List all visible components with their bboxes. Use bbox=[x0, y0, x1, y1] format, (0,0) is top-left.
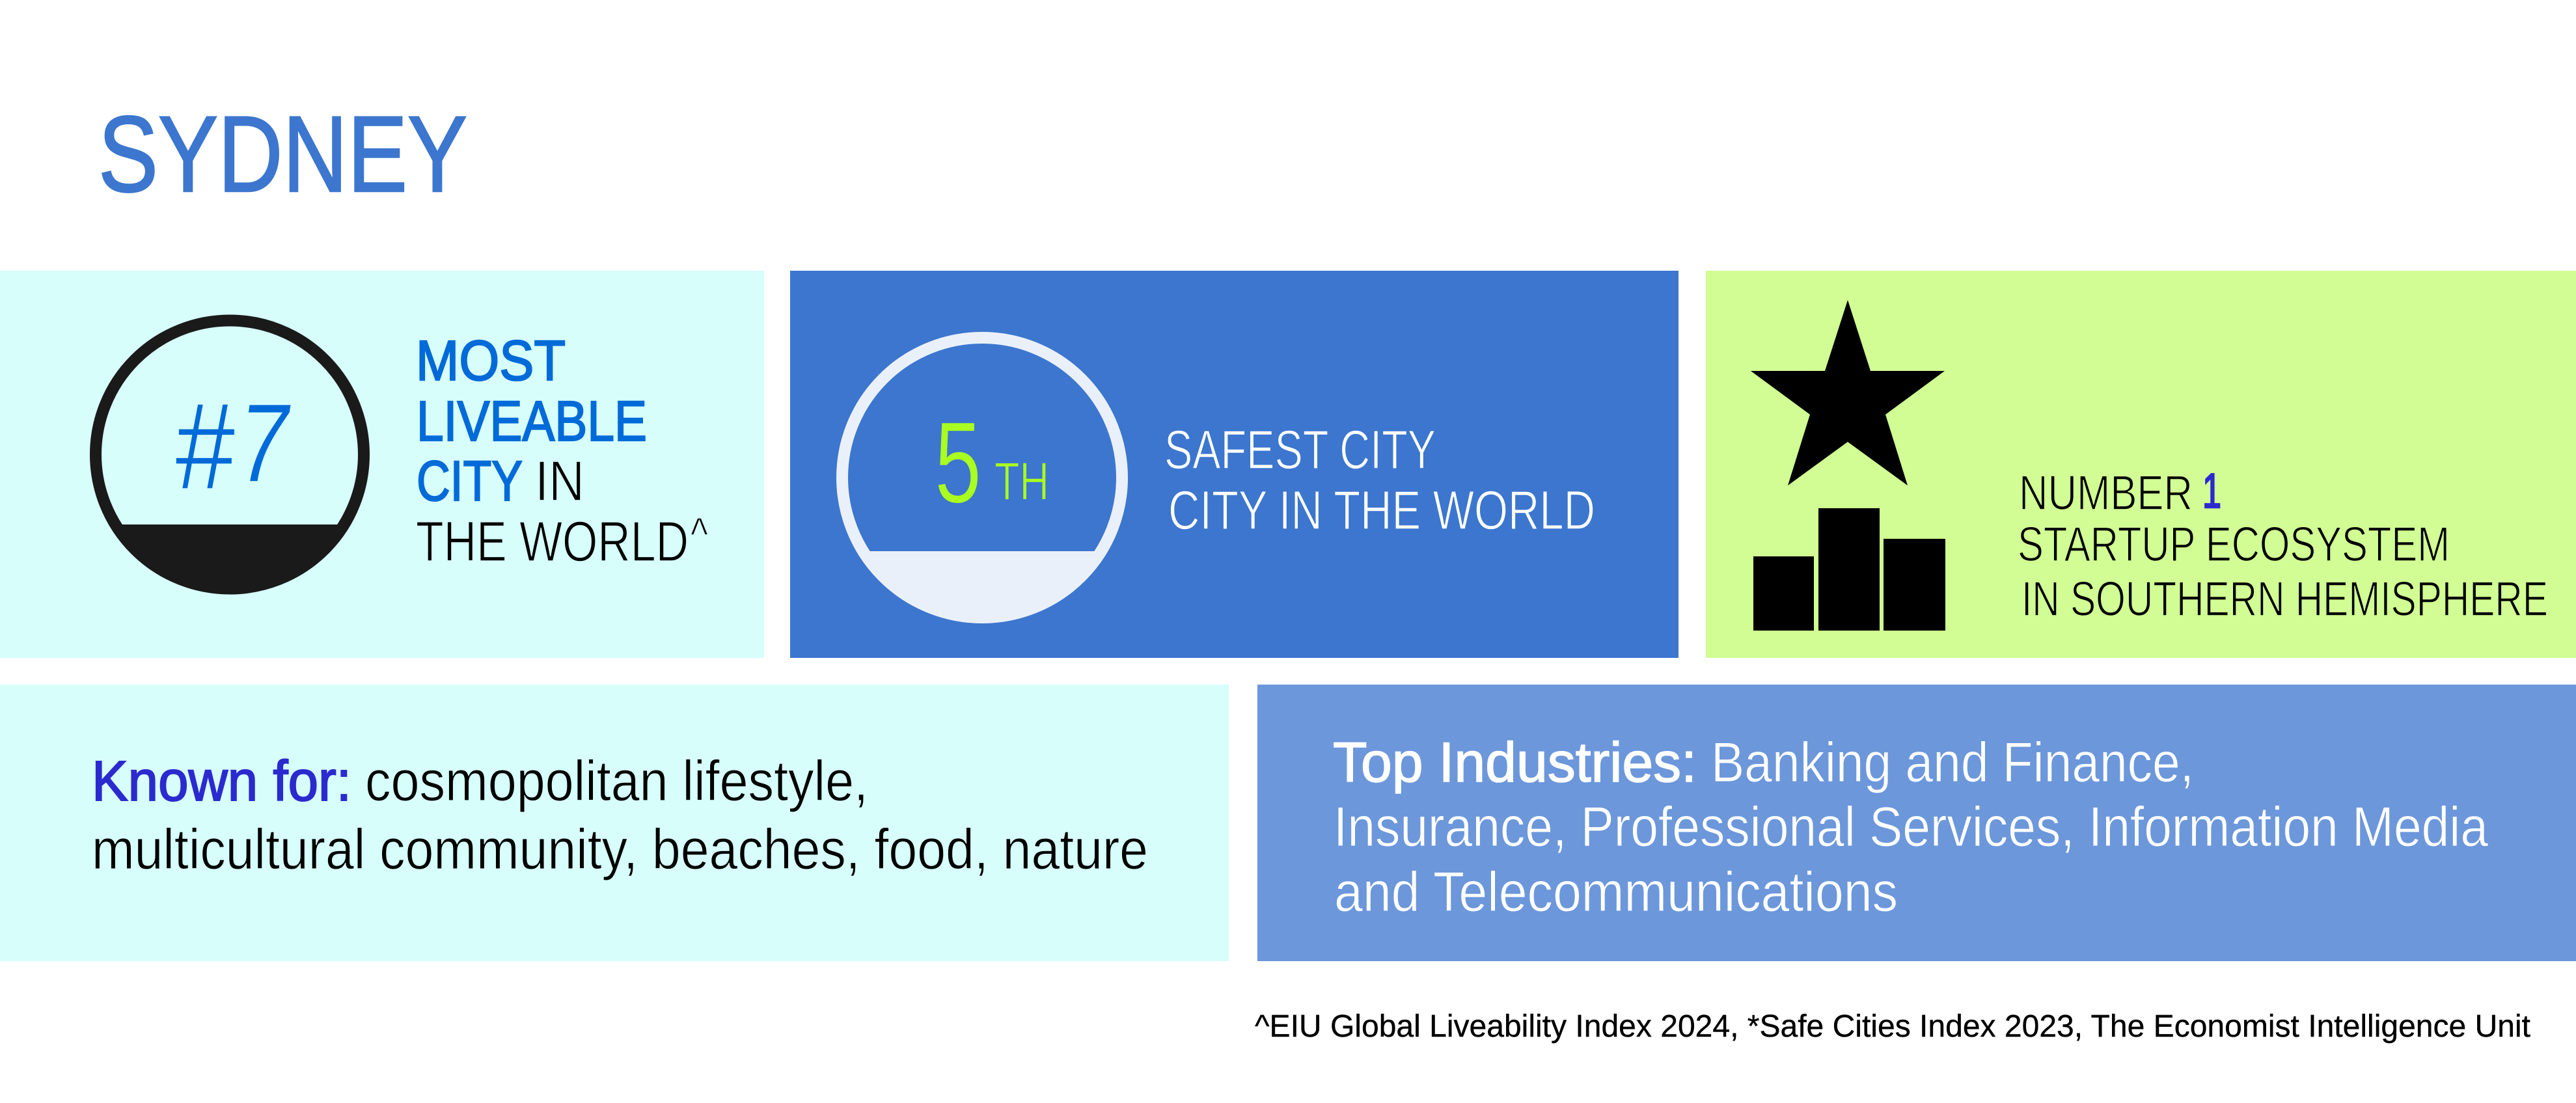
footnote: ^EIU Global Liveability Index 2024, *Safe Cities Index 2023, The Economist Intelligence Unit bbox=[1255, 1009, 2530, 1044]
rank number bbox=[935, 398, 1049, 527]
icon: rank circle bbox=[96, 320, 364, 588]
icon: star bbox=[1751, 300, 1945, 485]
text: most liveable city in the world: MOST bbox=[416, 329, 566, 392]
title: SYDNEY bbox=[98, 94, 467, 215]
text: known for: multicultural community, beaches, food, nature bbox=[92, 818, 1148, 881]
rank number: # bbox=[174, 377, 235, 515]
text: most liveable city in the world: CITY bbox=[417, 450, 523, 513]
panel: known for bbox=[0, 685, 1229, 961]
text: safest city in the world: CITY IN THE WORLD bbox=[1168, 480, 1595, 541]
icon: rank circle bbox=[842, 338, 1122, 618]
text: number 1 startup ecosystem: 1 bbox=[2202, 463, 2221, 518]
panel: most liveable city bbox=[0, 271, 764, 658]
text: most liveable city in the world: LIVEABLE bbox=[417, 390, 647, 453]
text: number 1 startup ecosystem: STARTUP ECOSYSTEM bbox=[2018, 517, 2450, 571]
text: top industries: Top Industries: bbox=[1333, 731, 1697, 794]
rank number: 5 bbox=[935, 398, 981, 527]
text: most liveable city in the world: IN bbox=[535, 450, 584, 513]
text: known for bbox=[92, 750, 1148, 881]
text: number 1 startup ecosystem bbox=[2018, 463, 2548, 626]
text: most liveable city in the world bbox=[416, 329, 708, 573]
text: top industries: and Telecommunications bbox=[1334, 861, 1898, 923]
text: safest city in the world: SAFEST CITY bbox=[1164, 419, 1436, 480]
rank number bbox=[174, 377, 291, 515]
text: safest city in the world bbox=[1164, 419, 1595, 541]
text: number 1 startup ecosystem: NUMBER bbox=[2019, 465, 2193, 520]
text: known for: cosmopolitan lifestyle, bbox=[365, 750, 868, 813]
text: most liveable city in the world: THE WORLD bbox=[416, 510, 689, 573]
icon: podium bars bbox=[1753, 508, 1945, 631]
panel: startup ecosystem bbox=[1706, 271, 2576, 658]
rank number: TH bbox=[994, 451, 1049, 511]
text: top industries: Banking and Finance, bbox=[1711, 731, 2194, 794]
panel: safest city bbox=[790, 271, 1679, 658]
text: top industries bbox=[1333, 731, 2488, 923]
text: known for: Known for: bbox=[92, 750, 351, 813]
text: most liveable city in the world: ^ bbox=[691, 509, 708, 561]
rank number: 7 bbox=[239, 381, 291, 506]
panel: top industries bbox=[1257, 685, 2576, 961]
